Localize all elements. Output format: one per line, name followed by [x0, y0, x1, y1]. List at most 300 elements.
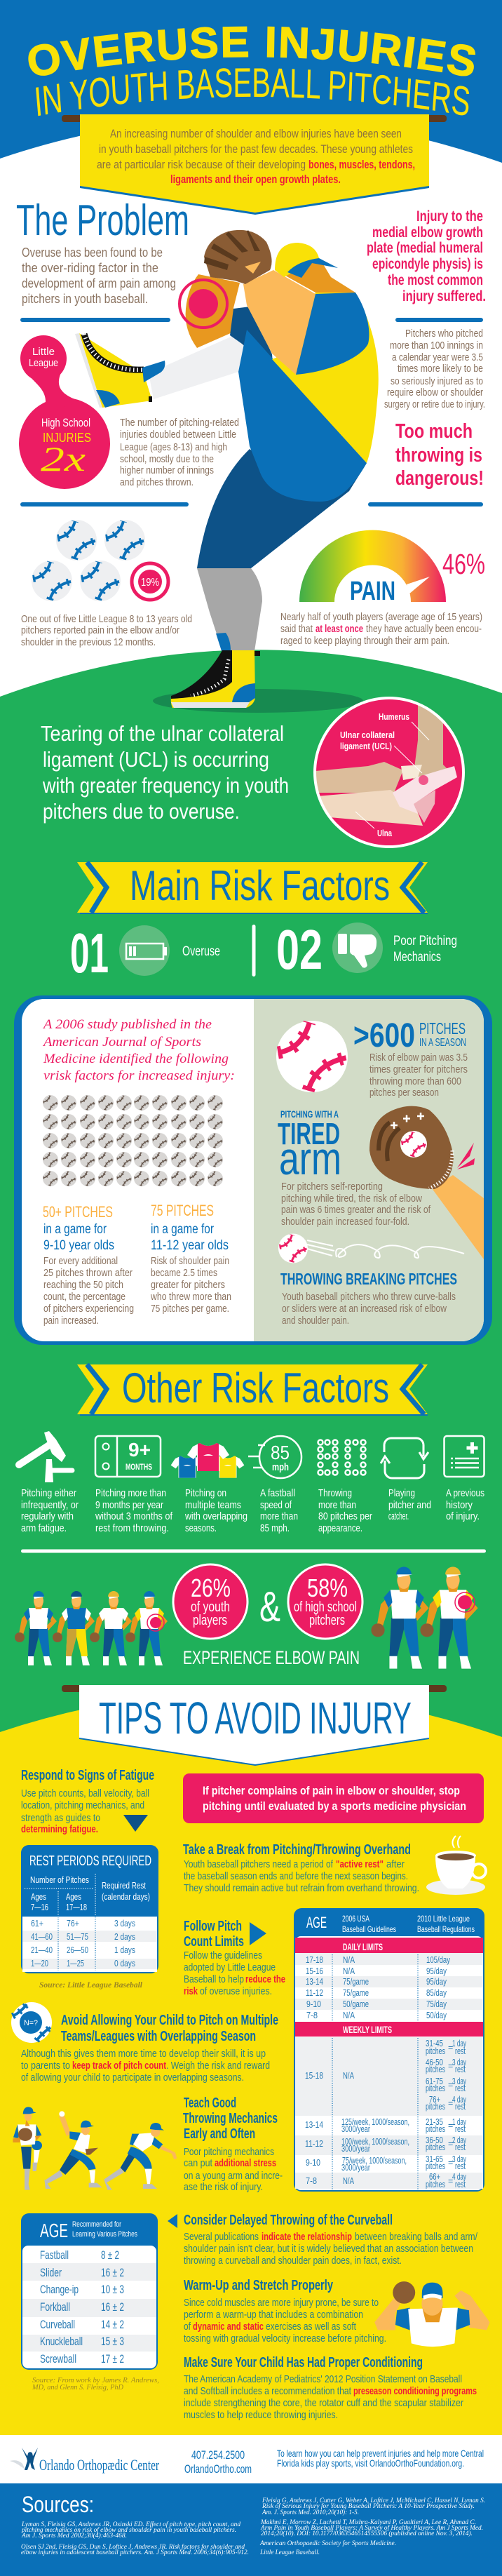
table: pitch count limits: pitches: [426, 2180, 445, 2189]
stat: 75 pitches: 75 PITCHES: [151, 1202, 214, 1219]
risk factor: pitcher and catcher: [381, 1438, 431, 1522]
table: pitch count limits: 85/day: [426, 1988, 447, 1998]
tip: proper conditioning: [184, 2355, 477, 2421]
stat: 50+ pitches: For every additional: [43, 1255, 118, 1267]
table: rest periods required: Required Rest: [102, 1881, 146, 1891]
table: pitch count limits: 2010 Little League: [417, 1914, 470, 1924]
risk factor: fatigue: arm fatigue.: [21, 1522, 67, 1534]
risk factor: 9+ months: rest from throwing.: [95, 1522, 169, 1534]
stat: over 600 pitches: PITCHES: [419, 1019, 466, 1038]
panel: main risk details: [14, 995, 492, 1345]
table: rest periods required: 76+: [67, 1919, 79, 1928]
table: pitch count limits: 105/day: [426, 1955, 451, 1965]
stat: 75 pitches: became 2.5 times: [151, 1267, 217, 1279]
heading banner: Main Risk Factors: [77, 862, 428, 914]
table: recommended age for pitches: Screwball: [40, 2352, 76, 2366]
tip: warm-up and stretch: exercises as well as soft: [266, 2321, 356, 2333]
pitch count ball grid: [43, 1095, 223, 1186]
source note: Andrews and Fleisig: Source: From work by James R. Andrews,: [32, 2376, 159, 2384]
tip: delayed curveball: indicate the relationship: [262, 2232, 352, 2243]
table: rest periods required: 1—20: [31, 1959, 48, 1968]
text block: injuries doubled: [120, 417, 239, 488]
tip: delayed curveball: Consider Delayed Throwing of the Curveball: [184, 2213, 393, 2228]
table: recommended age for pitches: Knuckleball: [40, 2335, 83, 2348]
table: pitch count limits: rest: [455, 2142, 466, 2152]
table: pitch count limits: WEEKLY LIMITS: [343, 2025, 392, 2035]
table: pitch count limits: 2 day: [452, 2135, 466, 2145]
risk factor: fatigue: regularly with: [21, 1510, 74, 1522]
callout: most common injury: [367, 208, 486, 304]
risk factor: 85 mph: speed of: [260, 1499, 292, 1511]
stat: tired arm: [278, 1106, 484, 1259]
table: recommended age for pitches: 10 ± 3: [101, 2283, 124, 2296]
tip: respond to signs of fatigue: Use pitch counts, ball velocity, ball: [21, 1788, 149, 1799]
tip: proper conditioning: and Softball includes a recommendation that: [184, 2386, 351, 2397]
table: pitch count limits: 36-50: [426, 2135, 443, 2145]
tip: avoid overlapping seasons: keep track of pitch count: [72, 2060, 166, 2072]
text block: UCL tearing: with greater frequency in youth: [42, 773, 289, 798]
source references: elbow injuries in adolescent baseball pitchers. Am. J Sports Med. 2006;34(6):905-912.: [21, 2549, 249, 2556]
table: pitch count limits: 7-8: [306, 2011, 318, 2020]
stat: 26% of youth players: of youth: [191, 1599, 230, 1615]
standing shoe: [171, 633, 260, 708]
figure: stretching player: [374, 2281, 490, 2347]
table: rest periods required: [21, 1845, 158, 1973]
tip: take a break: They should remain active but refrain from overhand throwing.: [184, 1883, 419, 1894]
source references: pitching mechanics on risk of elbow and shoulder pain in youth baseball pitchers.: [21, 2526, 236, 2534]
tip: take a break: the baseball season ends and before the next season begins.: [184, 1871, 408, 1882]
risk factor: 9+ months: 9+: [128, 1439, 151, 1461]
icon: N=? baseball: [11, 2002, 52, 2043]
title: [28, 27, 475, 116]
tip: follow pitch count limits: Count Limits: [184, 1934, 244, 1950]
stat: 26% of youth players: 26%: [191, 1574, 231, 1602]
table: pitch count limits: 9-10: [306, 2158, 320, 2168]
stat: breaking pitches: or sliders were at an increased risk of elbow: [282, 1303, 447, 1315]
title: OVERUSE INJURIES: [28, 27, 475, 76]
table: pitch count limits: rest: [455, 2124, 466, 2134]
head: [280, 260, 355, 293]
elbow anatomy diagram: Humerus: [379, 711, 409, 722]
table: pitch count limits: pitches: [426, 2142, 445, 2152]
tip: avoid overlapping seasons: Although this gives them more time to develop their skill, it is up: [21, 2048, 266, 2060]
intro banner: bones, muscles, tendons,: [308, 159, 415, 171]
tip: take a break: Youth baseball pitchers need a period of: [184, 1859, 334, 1870]
table: pitch count limits: =: [448, 2121, 453, 2131]
risk factor: previous injury: of injury.: [446, 1510, 480, 1522]
table: recommended age for pitches: 8 ± 2: [101, 2248, 119, 2262]
risk factor: multiple teams: seasons.: [185, 1522, 217, 1534]
risk factor: 85 mph: more than: [260, 1510, 298, 1522]
table: recommended age for pitches: 14 ± 2: [101, 2318, 124, 2331]
stat: 50+ pitches: pain increased.: [43, 1315, 99, 1327]
source references: Olsen SJ 2nd, Fleisig GS, Dun S, Loftice J, Andrews JR. Risk factors for shoulder and: [21, 2543, 245, 2551]
table: pitch count limits: N/A: [343, 1966, 355, 1976]
tip: warm-up and stretch: tossing with gradual velocity increase before pitching.: [184, 2333, 386, 2344]
heading: The Problem: The Problem: [16, 196, 189, 245]
table: pitch count limits: 75/day: [426, 1999, 447, 2009]
tip: delayed curveball: between breaking balls and arm/: [355, 2232, 478, 2243]
text block: nearly half: said that: [280, 623, 313, 635]
tip: warm-up and stretch: dynamic and static: [193, 2321, 264, 2333]
table: pitch count limits: 3 day: [452, 2058, 466, 2067]
text block: 100 innings: Pitchers who pitched: [405, 328, 483, 340]
table: rest periods required: 2 days: [114, 1932, 135, 1942]
ampersand: &: [259, 1583, 280, 1630]
source references: Am. J. Sports Med. 2010;20(10): 1-5.: [262, 2509, 359, 2516]
tip: teach good throwing mechanics: [183, 2095, 283, 2193]
stat: over 600 pitches: pitches per season: [369, 1087, 439, 1099]
table: rest periods required: REST PERIODS REQUIRED: [29, 1853, 151, 1869]
source references: Arm Pain in Youth Baseball Players: A Survey of Healthy Players. Am J Sports Med.: [260, 2524, 483, 2532]
tip: avoid overlapping seasons: . Weigh the risk and reward: [166, 2060, 270, 2072]
table: pitch count limits: 95/day: [426, 1966, 447, 1976]
table: rest periods required: Ages: [66, 1892, 81, 1902]
stat bubble: 2x injuries: [19, 335, 110, 489]
risk factor: 80 pitches: 80 pitches per: [318, 1510, 372, 1522]
tip: take a break: "active rest": [336, 1859, 384, 1870]
figures: two high school pitchers: [371, 1567, 478, 1669]
table: rest periods required: 61+: [31, 1919, 43, 1928]
tip: teach good throwing mechanics: Poor pitching mechanics: [184, 2147, 274, 2158]
risk factor: previous injury: A previous: [446, 1487, 484, 1499]
stat: 50+ pitches: of pitchers experiencing: [43, 1303, 134, 1315]
source references: Fleisig G, Andrews J, Cutter G, Weber A, Loftice J, McMichael C, Hassel N, Lyman S.: [262, 2497, 485, 2504]
text block: 100 innings: [384, 328, 485, 410]
table: pitch count limits: =: [448, 2158, 453, 2168]
table: pitch count limits: 11-12: [306, 1988, 323, 1998]
factor 02: poor mechanics: [276, 918, 457, 981]
tip: teach good throwing mechanics: ase the risk of injury.: [184, 2182, 263, 2193]
table: rest periods required: 41—60: [31, 1932, 53, 1942]
table: pitch count limits: pitches: [426, 2124, 445, 2134]
table: pitch count limits: =: [448, 2176, 453, 2186]
table: pitch count limits: 17-18: [306, 1955, 323, 1965]
intro banner: are at particular risk because of their developing: [97, 159, 306, 171]
table: pitch count limits: =: [448, 2080, 453, 2090]
elbow anatomy diagram: Ulnar collateral: [340, 730, 395, 740]
stat: 50+ pitches: count, the percentage: [43, 1291, 126, 1303]
icon group: five baseballs, 19%: 19%: [141, 577, 159, 589]
table: rest periods required: 26—50: [67, 1945, 88, 1955]
stat: tired arm: shoulder pain increased four-fold.: [281, 1216, 409, 1228]
source note: Andrews and Fleisig: MD, and Glenn S. Fleisig, PhD: [32, 2383, 123, 2391]
text block: UCL tearing: [41, 721, 289, 824]
table: pitch count limits: 66+: [429, 2172, 440, 2182]
heading banner: Tips to Avoid Injury: [62, 1685, 447, 1766]
stat: tired arm: arm: [279, 1132, 341, 1184]
tip: follow pitch count limits: of overuse injuries.: [200, 1986, 272, 1997]
factor 01: overuse: Overuse: [182, 944, 220, 959]
elbow anatomy diagram: [308, 691, 463, 847]
logo: Orlando Orthopaedic Center: [10, 2448, 159, 2474]
stat: over 600 pitches: Risk of elbow pain was 3.5: [369, 1052, 468, 1064]
table: recommended age for pitches: Curveball: [40, 2318, 75, 2331]
tip: warm-up and stretch: of: [184, 2321, 191, 2333]
risk factor: 80 pitches: more than: [318, 1499, 356, 1511]
callout: too much throwing: throwing is: [395, 444, 482, 467]
stat: 58% of high school pitchers: [288, 1564, 362, 1639]
source note: Source: Little League Baseball: [39, 1980, 143, 1990]
table: pitch count limits: =: [448, 2139, 453, 2149]
text block: injuries doubled: League (ages 8-13) and high: [120, 441, 227, 453]
table: pitch count limits: 15-16: [306, 1966, 323, 1976]
icon group: five baseballs, 19%: [32, 520, 168, 601]
heading: Sources: Sources:: [22, 2492, 94, 2517]
risk factor: 9+ months: Pitching more than: [95, 1487, 166, 1499]
factor 01: overuse: [70, 922, 220, 984]
table: rest periods required: 0 days: [114, 1959, 135, 1968]
text block: overuse: [22, 246, 176, 306]
table: pitch count limits: AGE: [306, 1914, 327, 1931]
tip: follow pitch count limits: Follow Pitch: [184, 1919, 242, 1934]
elbow pain marker: [179, 280, 227, 328]
table: pitch count limits: pitches: [426, 2046, 445, 2056]
glove: [204, 230, 272, 284]
tip: warm-up and stretch: Since cold muscles are more injury prone, be sure to: [184, 2297, 379, 2309]
risk factor: fatigue: infrequently, or: [21, 1499, 79, 1511]
table: pitch count limits: rest: [455, 2102, 466, 2112]
figures: four youth players: [15, 1591, 168, 1665]
second pitcher: [44, 2111, 102, 2189]
tip: follow pitch count limits: reduce the: [245, 1974, 285, 1985]
text block: overuse: the over-riding factor in the: [22, 261, 158, 275]
table: pitch count limits: 3000/year: [341, 2144, 370, 2154]
tip: delayed curveball: [168, 2213, 478, 2267]
table: pitch count limits: 15-18: [305, 2071, 323, 2081]
tip: warm-up and stretch: [184, 2278, 386, 2344]
source references: Lyman S, Fleisig GS, Andrews JR, Osinski ED. Effect of pitch type, pitch count, and: [21, 2521, 240, 2528]
text block: injuries doubled: and pitches thrown.: [120, 476, 194, 488]
stat bubble: 2x injuries: 2x: [41, 439, 86, 478]
source references: 2014;20(10). DOI: 10.1177/0363546514555506 (published online Nov. 3, 2014).: [261, 2530, 473, 2537]
table: recommended age for pitches: 17 ± 2: [101, 2352, 124, 2366]
factor 02: poor mechanics: 02: [276, 918, 323, 981]
table: rest periods required: Ages: [31, 1892, 46, 1902]
table: pitch count limits: 3 day: [452, 2077, 466, 2086]
table: pitch count limits: 3000/year: [341, 2124, 370, 2134]
table: rest periods required: 3 days: [114, 1919, 135, 1928]
text block: one out of five: pitchers reported pain in the elbow and/or: [21, 624, 179, 636]
table: rest periods required: 17—18: [66, 1903, 87, 1912]
intro banner: ligaments and their open growth plates.: [170, 173, 341, 186]
contact details: [184, 2448, 252, 2476]
source references: [21, 2497, 485, 2556]
table: pitch count limits: rest: [455, 2161, 466, 2171]
stat: 58% of high school pitchers: of high school: [294, 1599, 357, 1615]
tip: delayed curveball: Several publications: [184, 2232, 259, 2243]
risk factor: 80 pitches: [318, 1440, 372, 1534]
tip: avoid overlapping seasons: of allowing your child to participate in overlapping seasons.: [21, 2072, 244, 2084]
table: pitch count limits: =: [448, 2098, 453, 2108]
table: pitch count limits: N/A: [343, 1955, 355, 1965]
tip: take a break: after: [386, 1859, 405, 1870]
table: recommended age for pitches: Learning Various Pitches: [72, 2230, 137, 2239]
table: recommended age for pitches: AGE: [40, 2220, 68, 2241]
table: pitch count limits: rest: [455, 2180, 466, 2189]
stat: breaking pitches: and shoulder pain.: [282, 1315, 349, 1327]
table: pitch count limits: 61-75: [426, 2077, 443, 2086]
tip: follow pitch count limits: adopted by Little League: [184, 1962, 276, 1973]
text block: 100 innings: times more likely to be: [398, 363, 483, 375]
tip: follow pitch count limits: risk: [184, 1986, 198, 1997]
table: recommended age for pitches: 16 ± 2: [101, 2300, 124, 2314]
stat: tired arm: PITCHING WITH A: [280, 1108, 339, 1120]
stat: 50+ pitches: 9-10 year olds: [43, 1238, 114, 1253]
table: pitch count limits: DAILY LIMITS: [343, 1942, 383, 1952]
callout: stop pitching: If pitcher complains of pain in elbow or shoulder, stop: [203, 1784, 460, 1797]
stat: 26% of youth players: [173, 1564, 247, 1639]
risk factor: pitcher and catcher: catcher.: [388, 1510, 409, 1522]
stat: 75 pitches: 75 pitches per game.: [151, 1303, 229, 1315]
table: pitch count limits: 4 day: [452, 2172, 466, 2182]
table: pitch count limits: =: [448, 2061, 453, 2071]
stat: 75 pitches: 11-12 year olds: [151, 1238, 229, 1253]
risk factor: multiple teams: multiple teams: [185, 1499, 241, 1511]
risk factor: 9+ months: 9 months per year: [95, 1499, 163, 1511]
risk factor: multiple teams: Pitching on: [185, 1487, 226, 1499]
table: rest periods required: 51—75: [67, 1932, 88, 1942]
tip: teach good throwing mechanics: Early and Often: [184, 2126, 255, 2142]
text block: overuse: development of arm pain among: [22, 276, 176, 290]
pain gauge: PAIN: [350, 577, 395, 606]
table: pitch count limits: rest: [455, 2065, 466, 2074]
table: pitch count limits: 50/game: [343, 1999, 369, 2009]
text block: injuries doubled: injuries doubled between Little: [120, 429, 236, 441]
risk factor: 85 mph: A fastball: [260, 1487, 295, 1499]
table: pitch count limits: 3000/year: [341, 2163, 370, 2173]
contact details: OrlandoOrtho.com: [184, 2462, 252, 2476]
table: pitch count limits: [294, 1908, 484, 2192]
table: pitch count limits: 75/game: [343, 1988, 369, 1998]
stat: over 600 pitches: times greater for pitchers: [369, 1064, 468, 1075]
study intro: A 2006 study published in the: [42, 1017, 212, 1032]
table: pitch count limits: 75/week, 1000/season,: [342, 2156, 407, 2166]
stat: 75 pitches: who threw more than: [150, 1291, 231, 1303]
stat: 75 pitches: in a game for: [151, 1222, 215, 1237]
table: pitch count limits: Baseball Regulations: [417, 1924, 475, 1934]
tip: follow pitch count limits: [184, 1919, 285, 1997]
table: recommended age for pitches: 15 ± 3: [101, 2335, 124, 2348]
foundation call to action: [277, 2448, 484, 2469]
table: pitch count limits: N/A: [343, 2071, 355, 2081]
study intro: vrisk factors for increased injury:: [43, 1068, 235, 1083]
caption: experience elbow pain: EXPERIENCE ELBOW PAIN: [183, 1647, 360, 1668]
stat: 50+ pitches: reaching the 50 pitch: [43, 1279, 123, 1291]
stat: over 600 pitches: [276, 1017, 468, 1099]
source references: American Orthopaedic Society for Sports Medicine.: [259, 2540, 396, 2547]
text block: one out of five: shoulder in the previous 12 months.: [21, 636, 156, 648]
torso: [272, 293, 379, 463]
risk factor: previous injury: history: [446, 1499, 473, 1511]
risk factor: 9+ months: MONTHS: [126, 1462, 152, 1472]
stat: 75 pitches: Risk of shoulder pain: [151, 1255, 229, 1267]
table: pitch count limits: 125/week, 1000/season,: [341, 2117, 409, 2127]
table: recommended age for pitches: Slider: [40, 2266, 62, 2279]
table: pitch count limits: rest: [455, 2084, 466, 2093]
table: pitch count limits: pitches: [426, 2084, 445, 2093]
callout: too much throwing: Too much: [395, 420, 473, 443]
intro banner: [62, 114, 447, 215]
risk factor: 85 mph: mph: [272, 1461, 289, 1473]
table: recommended age for pitches: Forkball: [40, 2300, 70, 2314]
tip: respond to signs of fatigue: [21, 1768, 154, 1835]
source references: Risk of Serious Injury for Young Baseball Pitchers: A 10-Year Prospective Study.: [262, 2502, 475, 2510]
heading banner: Other Risk Factors: Other Risk Factors: [122, 1364, 389, 1411]
table: recommended age for pitches: Change-ip: [40, 2283, 79, 2296]
risk factor: 80 pitches: Throwing: [318, 1487, 352, 1499]
text block: injuries doubled: school, mostly due to the: [120, 453, 214, 465]
figures: pitching sequence: [13, 2107, 177, 2190]
table: recommended age for pitches: Fastball: [40, 2248, 69, 2262]
study intro: Medicine identified the following: [43, 1052, 229, 1066]
pain gauge: 46%: [442, 548, 485, 580]
table: pitch count limits: 50/day: [426, 2011, 447, 2020]
table: rest periods required: 1 days: [114, 1945, 135, 1955]
study intro: American Journal of Sports: [42, 1035, 201, 1049]
factor 02: poor mechanics: Poor Pitching: [393, 934, 457, 948]
risk factor: previous injury: [445, 1436, 484, 1522]
tip: avoid overlapping seasons: Avoid Allowing Your Child to Pitch on Multiple: [61, 2013, 278, 2028]
table: pitch count limits: rest: [455, 2046, 466, 2056]
first pitcher: [13, 2107, 42, 2190]
table: rest periods required: 21—40: [31, 1945, 53, 1955]
table: pitch count limits: 3 day: [452, 2154, 466, 2164]
elbow anatomy diagram: Ulna: [377, 828, 393, 838]
table: pitch count limits: 76+: [429, 2095, 440, 2105]
logo: Orlando Orthopaedic Center: Orlando Orthopædic Center: [39, 2456, 159, 2474]
tip: delayed curveball: throwing a curveball and shoulder pain does, in fact, exist.: [184, 2255, 402, 2267]
tip: teach good throwing mechanics: can put: [184, 2158, 212, 2169]
intro banner: in youth baseball pitchers for the past few decades. These young athletes: [99, 143, 413, 156]
risk factor: pitcher and catcher: Playing: [388, 1487, 415, 1499]
raised leg: [149, 330, 247, 399]
study intro: [42, 1017, 235, 1083]
table: pitch count limits: 7-8: [306, 2176, 317, 2186]
table: recommended age for pitches: 16 ± 2: [101, 2266, 124, 2279]
table: pitch count limits: 31-65: [426, 2154, 443, 2164]
table: pitch count limits: 100/week, 1000/season,: [341, 2137, 409, 2147]
text block: injuries doubled: higher number of innings: [120, 464, 214, 476]
stat: 50+ pitches: 25 pitches thrown after: [43, 1267, 133, 1279]
text block: UCL tearing: Tearing of the ulnar collateral: [41, 721, 284, 746]
source references: Little League Baseball.: [259, 2549, 320, 2556]
table: pitch count limits: Baseball Guidelines: [342, 1924, 396, 1934]
tip: respond to signs of fatigue: Respond to Signs of Fatigue: [21, 1768, 154, 1783]
pain gauge: [299, 530, 485, 606]
risk factor: 85 mph: [248, 1436, 301, 1534]
tip: proper conditioning: muscles to help reduce throwing injuries.: [184, 2410, 338, 2421]
stat: 26% of youth players: players: [193, 1613, 227, 1628]
tip: teach good throwing mechanics: Throwing Mechanics: [183, 2111, 278, 2126]
risk factor: fatigue: [19, 1431, 79, 1534]
table: pitch count limits: 13-14: [306, 1977, 323, 1987]
stat: 58% of high school pitchers: 58%: [307, 1574, 348, 1602]
table: pitch count limits: pitches: [426, 2161, 445, 2171]
stat: tired arm: TIRED: [278, 1117, 340, 1151]
stat: 58% of high school pitchers: pitchers: [309, 1613, 345, 1628]
stat: over 600 pitches: IN A SEASON: [419, 1037, 466, 1049]
risk factor: 9+ months: [95, 1436, 173, 1534]
tip: follow pitch count limits: Follow the guidelines: [184, 1950, 262, 1961]
risk factor: 85 mph: 85 mph.: [260, 1522, 290, 1534]
icon: coffee cup: [426, 1836, 486, 1895]
tip: avoid overlapping seasons: to parents to: [21, 2060, 70, 2072]
table: rest periods required: Number of Pitches: [30, 1875, 89, 1885]
table: pitch count limits: pitches: [426, 2102, 445, 2112]
table: pitch count limits: 9-10: [306, 1999, 321, 2009]
icon: N=? baseball: N=?: [24, 2019, 38, 2027]
